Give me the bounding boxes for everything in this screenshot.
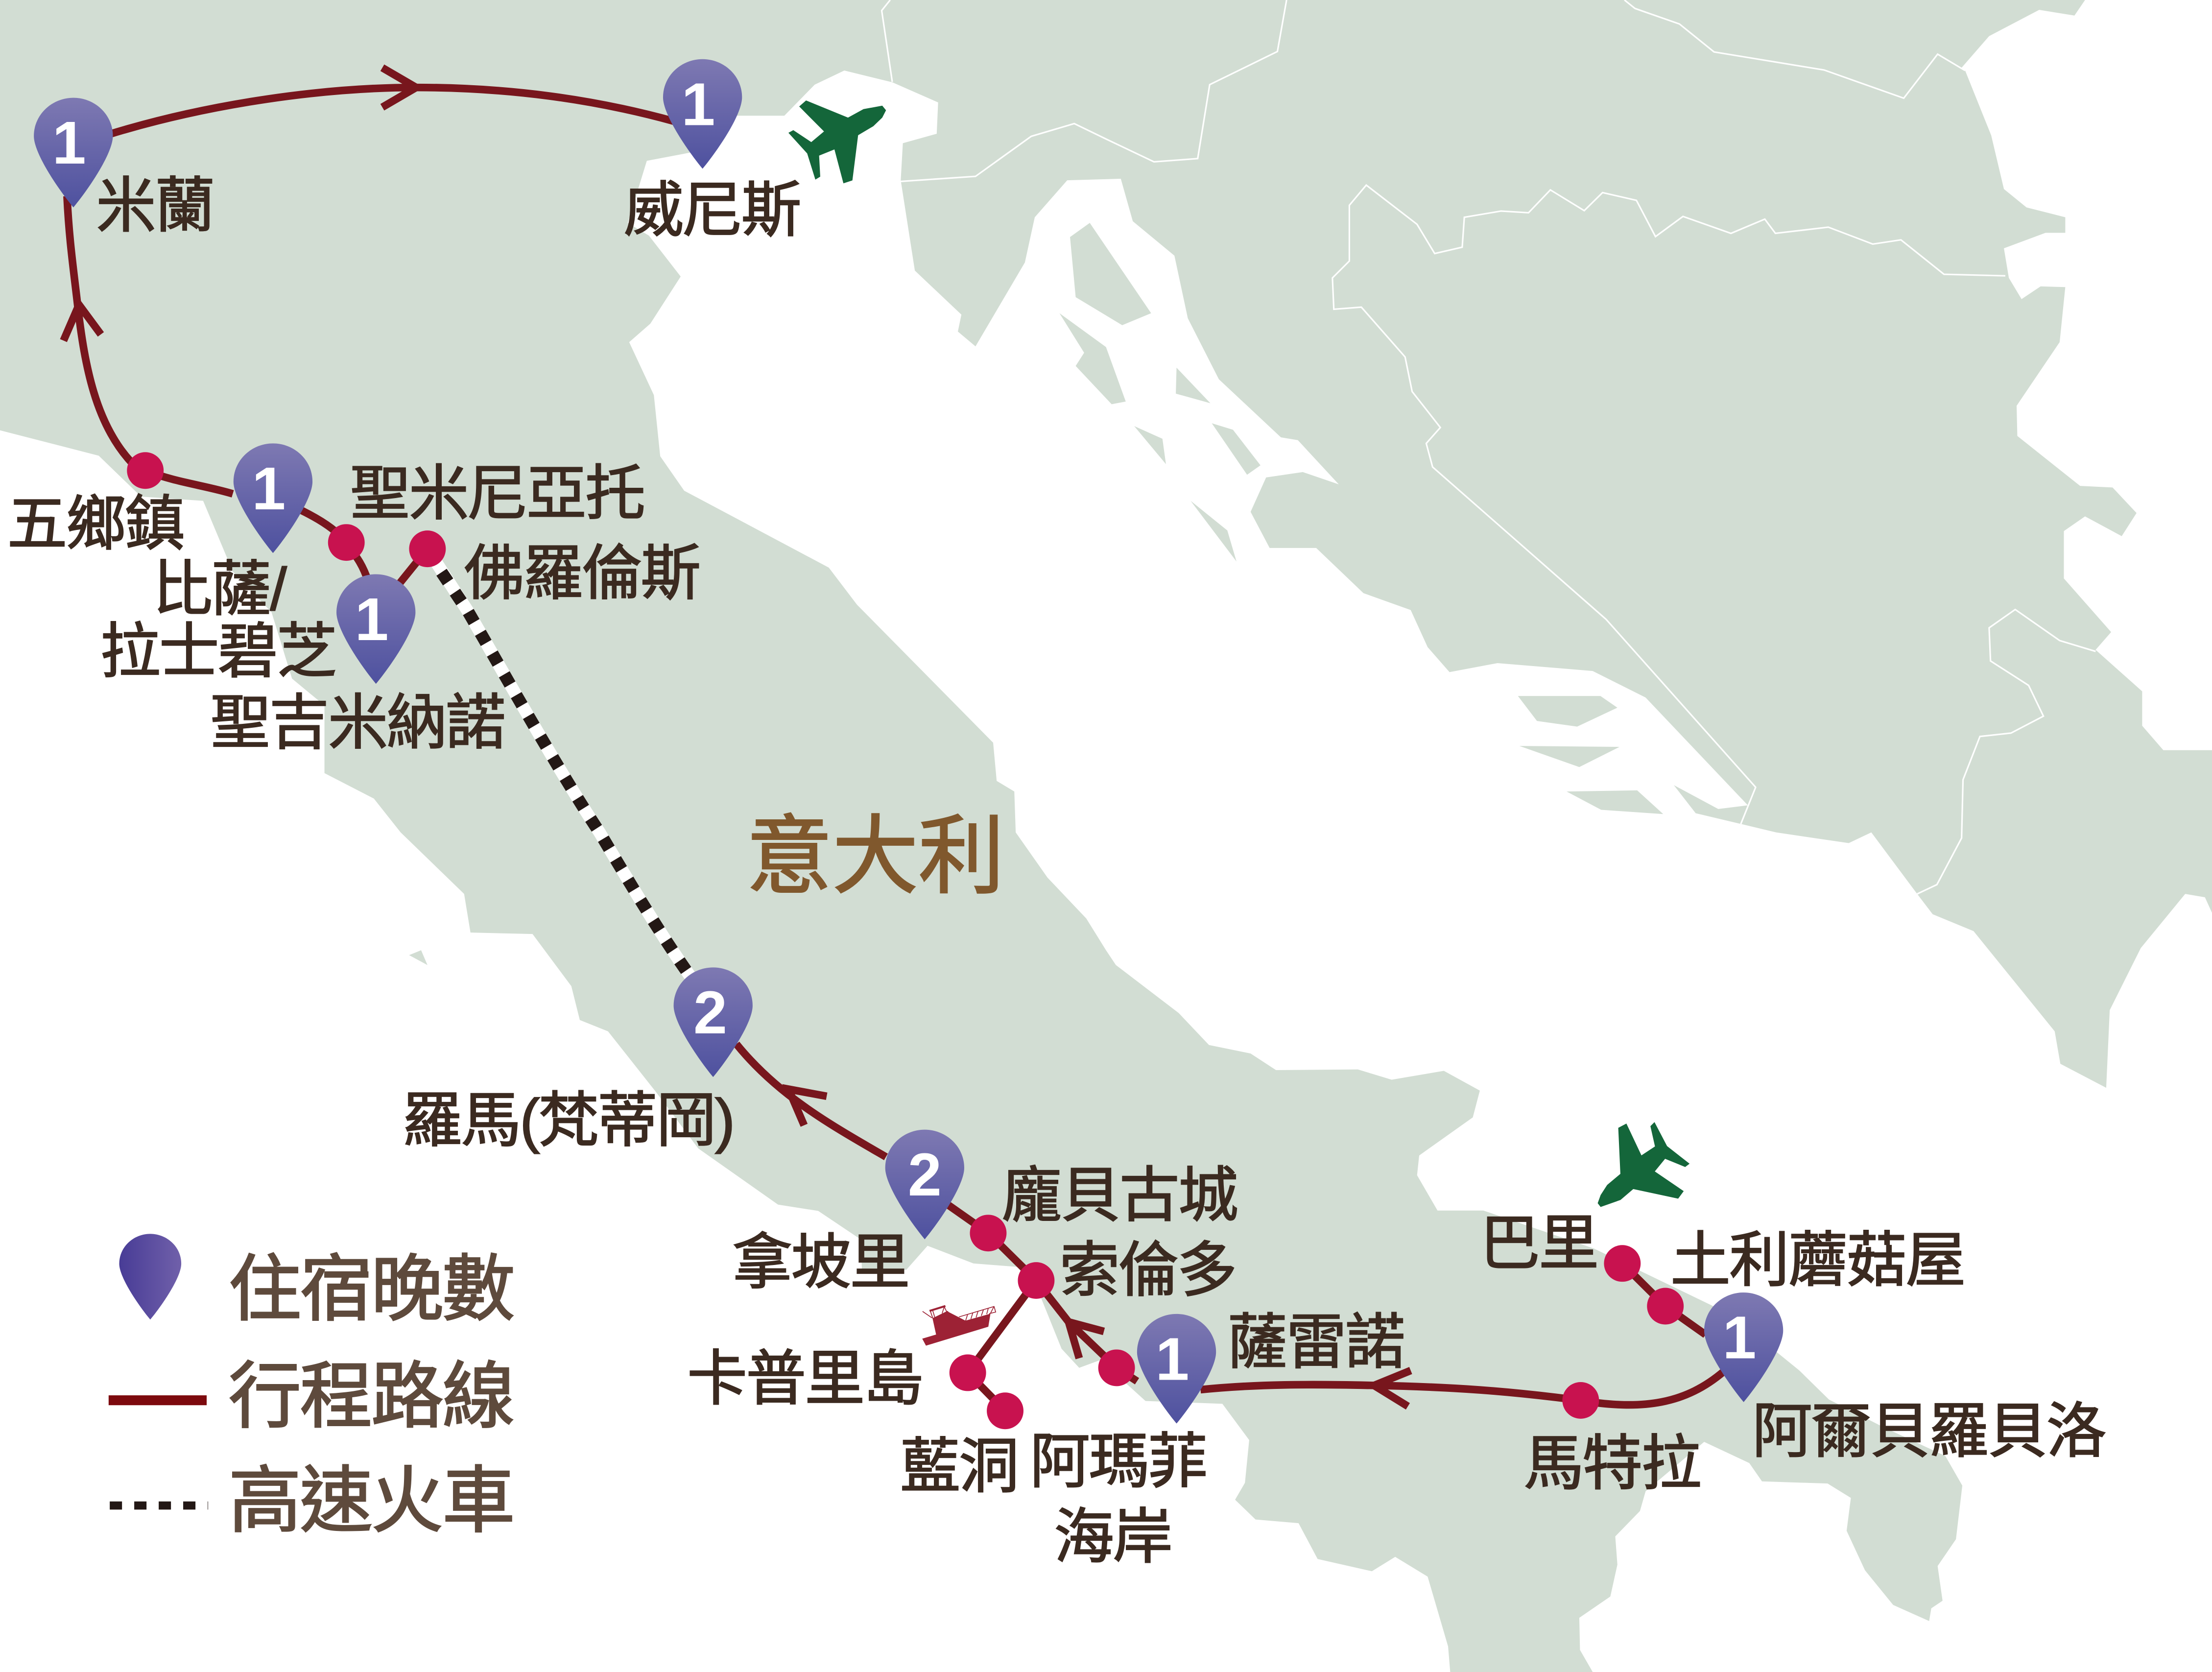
stop dots <box>127 452 1684 1429</box>
pin: Milan 1 night: 1 <box>52 109 86 177</box>
pin: Pisa 1 night <box>234 443 312 553</box>
legend: nights pin icon <box>119 1234 181 1319</box>
pin: Amalfi 1 night <box>1137 1314 1216 1424</box>
itinerary route line <box>64 68 1724 1411</box>
pin: Alberobello 1 night <box>1704 1292 1783 1402</box>
icon: ferry boat to Capri <box>922 1306 996 1346</box>
route direction arrows <box>64 68 1411 1407</box>
label: Amalfi Coast: 阿瑪菲 <box>1030 1429 1207 1496</box>
pin: Amalfi 1 night: 1 <box>1155 1325 1189 1393</box>
legend: route line sample <box>109 1395 207 1405</box>
legend: train line sample <box>110 1504 208 1507</box>
pin: Alberobello 1 night: 1 <box>1723 1304 1756 1372</box>
pin: Venice 1 night: 1 <box>682 71 715 138</box>
label: Blue Grotto: 藍洞 <box>900 1433 1018 1500</box>
label: Florence: 佛羅倫斯 <box>464 540 700 607</box>
pin: Venice 1 night <box>663 59 742 169</box>
map: country borders <box>881 0 2095 894</box>
label: Salerno: 薩雷諾 <box>1228 1309 1404 1376</box>
label: Milan: 米蘭 <box>96 173 214 240</box>
pin: Pisa 1 night: 1 <box>252 455 285 523</box>
label: Rome (Vatican): 羅馬(梵蒂岡) <box>402 1087 734 1154</box>
label: Pisa / La Spezia <box>100 556 335 685</box>
pin: Naples 2 nights: 2 <box>908 1141 942 1209</box>
pin: Naples 2 nights <box>885 1130 964 1239</box>
pin: San Gimignano 1 night: 1 <box>355 586 389 653</box>
pin: Rome 2 nights <box>674 967 753 1077</box>
label: Cinque Terre: 五鄉鎮 <box>7 491 184 558</box>
land: Croatian islands <box>1070 223 1151 325</box>
pin: San Gimignano 1 night <box>336 574 415 684</box>
label: Bari: 巴里 <box>1480 1210 1597 1277</box>
label: Pisa / La Spezia: 比薩/ <box>152 556 287 623</box>
icon: airplane arriving Bari <box>1598 1122 1689 1207</box>
label: Amalfi Coast: 海岸 <box>1054 1504 1171 1571</box>
legend: route label: 行程路線 <box>229 1356 514 1437</box>
label: Venice: 威尼斯 <box>624 177 800 244</box>
label: Alberobello: 阿爾貝羅貝洛 <box>1752 1398 2105 1465</box>
label: Naples: 拿坡里 <box>732 1229 909 1296</box>
label: San Miniato: 聖米尼亞托 <box>350 460 644 527</box>
label: Amalfi Coast <box>1030 1429 1207 1571</box>
label: Pisa / La Spezia: 拉士碧芝 <box>100 618 335 685</box>
legend <box>109 1234 514 1542</box>
label: Trulli houses: 土利蘑菇屋 <box>1670 1227 1965 1294</box>
label: Matera: 馬特拉 <box>1523 1431 1700 1498</box>
label: Pompeii: 龐貝古城 <box>1002 1162 1237 1229</box>
label: Capri: 卡普里島 <box>687 1346 923 1413</box>
label: San Gimignano: 聖吉米納諾 <box>211 690 504 757</box>
legend: train label: 高速火車 <box>229 1460 514 1542</box>
pin: Rome 2 nights: 2 <box>693 979 727 1047</box>
label: Sorrento: 索倫多 <box>1060 1237 1236 1304</box>
icon: airplane departing Venice <box>788 100 886 183</box>
high-speed train route <box>428 549 691 978</box>
legend: nights label: 住宿晚數 <box>229 1249 514 1330</box>
label: Italy: 意大利 <box>746 809 1004 905</box>
pin: Milan 1 night <box>34 98 113 207</box>
